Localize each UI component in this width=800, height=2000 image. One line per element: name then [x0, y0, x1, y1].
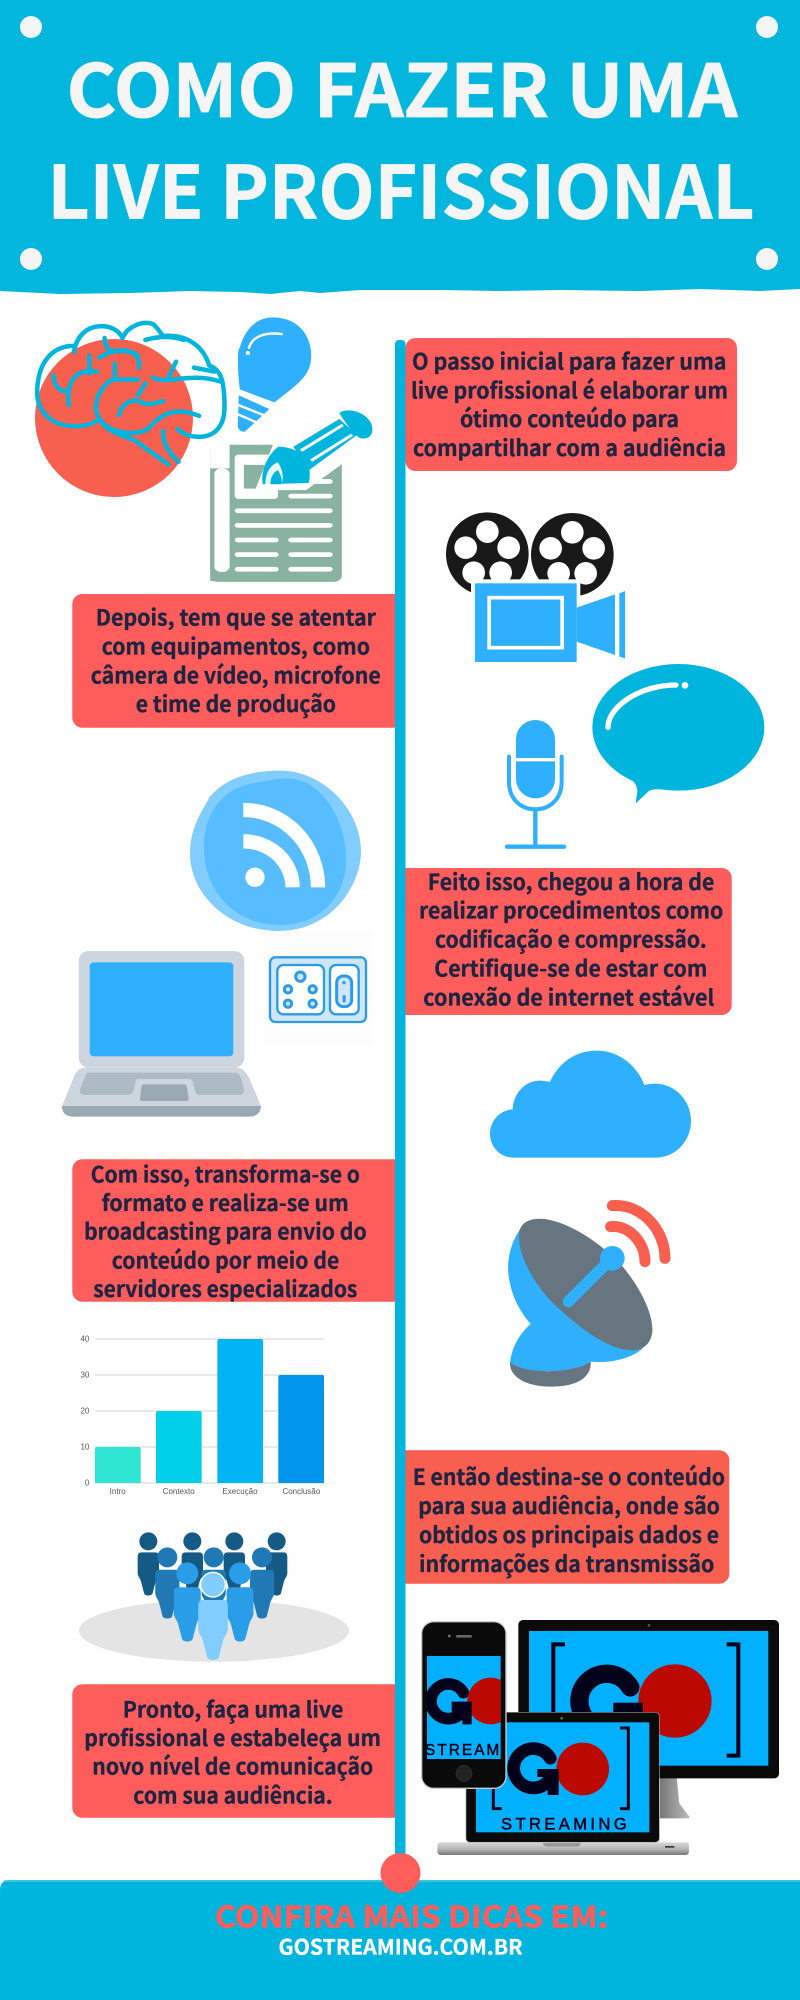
icon: cloud — [490, 1051, 691, 1158]
icon: laptop — [62, 951, 261, 1117]
x axis labels: Conclusão — [282, 1487, 321, 1496]
panel: step 6 text: Pronto, faça uma live — [123, 1692, 343, 1724]
panel: step 1 text: compartilhar com a audiência — [413, 431, 726, 463]
panel: step 1 text: live profissional é elaborar um — [411, 374, 728, 406]
footer url: GOSTREAMING.COM.BR — [278, 1932, 522, 1962]
title: COMO FAZER UMA — [66, 33, 739, 139]
y axis labels: 30 — [80, 1370, 90, 1379]
phone — [422, 1622, 514, 1788]
panel: step 5 text: obtidos os principais dados e — [419, 1518, 719, 1550]
panel: step 5 text: para sua audiência, onde são — [418, 1489, 720, 1521]
signal waves — [611, 1206, 665, 1262]
panel: step 3 text: realizar procedimentos como — [419, 894, 723, 926]
panel: step 6 text: novo nível de comunicação — [92, 1750, 373, 1782]
icon: film camera — [446, 512, 625, 662]
panel: step 1 text — [406, 338, 737, 471]
panel: step 6 text: com sua audiência. — [133, 1779, 333, 1811]
header banner — [0, 0, 800, 294]
x axis labels — [110, 1487, 321, 1496]
panel: step 5 text: E então destina-se o conteúdo — [413, 1460, 725, 1492]
laptop: STREAMING — [501, 1814, 627, 1833]
icon: satellite dish — [508, 1206, 665, 1387]
panel: step 2 text: câmera de vídeo, microfone — [91, 658, 381, 690]
panel: step 2 text: Depois, tem que se atentar — [96, 601, 376, 633]
panel: step 3 text — [395, 865, 732, 1015]
icon: microphone — [507, 720, 564, 847]
monitor — [518, 1620, 779, 1818]
y axis labels: 10 — [80, 1442, 90, 1451]
y axis labels: 20 — [80, 1406, 90, 1415]
panel: step 5 text: informações da transmissão — [419, 1547, 714, 1579]
footer heading: CONFIRA MAIS DICAS EM: — [215, 1892, 608, 1936]
title — [48, 33, 754, 241]
icon: light bulb — [238, 317, 311, 432]
panel: step 4 text: broadcasting para envio do — [84, 1214, 367, 1246]
footer band — [0, 1880, 800, 2000]
panel: step 2 text — [72, 594, 404, 728]
panel: step 4 text — [72, 1157, 404, 1304]
phone: STREAM — [425, 1742, 499, 1759]
panel: step 1 text: ótimo conteúdo para — [460, 402, 679, 434]
bars — [95, 1339, 324, 1483]
document lines — [235, 455, 333, 572]
panel: step 6 text — [72, 1684, 404, 1818]
film reels — [446, 512, 614, 596]
icon: rss signal — [190, 771, 361, 931]
icon: speech bubble — [592, 664, 764, 803]
icon: wall socket — [263, 933, 373, 1043]
panel: step 4 text: conteúdo por meio de — [112, 1243, 339, 1275]
title: LIVE PROFISSIONAL — [48, 135, 754, 241]
x axis labels: Execução — [222, 1487, 258, 1496]
panel: step 4 text: Com isso, transforma-se o — [91, 1157, 360, 1189]
panel: step 6 text: profissional e estabeleça um — [84, 1721, 381, 1753]
y axis labels: 40 — [80, 1334, 90, 1343]
x axis labels: Contexto — [163, 1487, 195, 1496]
icon: document with pencil — [210, 409, 375, 582]
panel: step 4 text: formato e realiza-se um — [102, 1186, 349, 1218]
camera body — [475, 583, 577, 662]
panel: step 3 text: codificação e compressão. — [435, 923, 707, 955]
icon: devices with logo — [422, 1620, 779, 1855]
panel: step 3 text: conexão de internet estável — [423, 980, 714, 1012]
panel: step 2 text: com equipamentos, como — [102, 629, 370, 661]
bar chart — [80, 1334, 324, 1496]
icon: brain — [35, 323, 224, 497]
timeline line and end dot — [380, 340, 420, 1893]
panel: step 3 text: Certifique-se de estar com — [434, 952, 707, 984]
icon: audience — [79, 1532, 349, 1662]
panel: step 4 text: servidores especializados — [93, 1272, 357, 1304]
laptop — [437, 1712, 689, 1855]
header pins — [20, 16, 778, 270]
pencil — [255, 409, 375, 490]
panel: step 2 text: e time de produção — [136, 687, 336, 719]
panel: step 3 text: Feito isso, chegou a hora de — [428, 865, 714, 897]
panel: step 1 text: O passo inicial para fazer uma — [412, 344, 726, 376]
y axis labels: 0 — [85, 1478, 90, 1487]
panel: step 5 text — [395, 1450, 729, 1584]
x axis labels: Intro — [110, 1487, 126, 1496]
y axis labels — [80, 1334, 90, 1487]
